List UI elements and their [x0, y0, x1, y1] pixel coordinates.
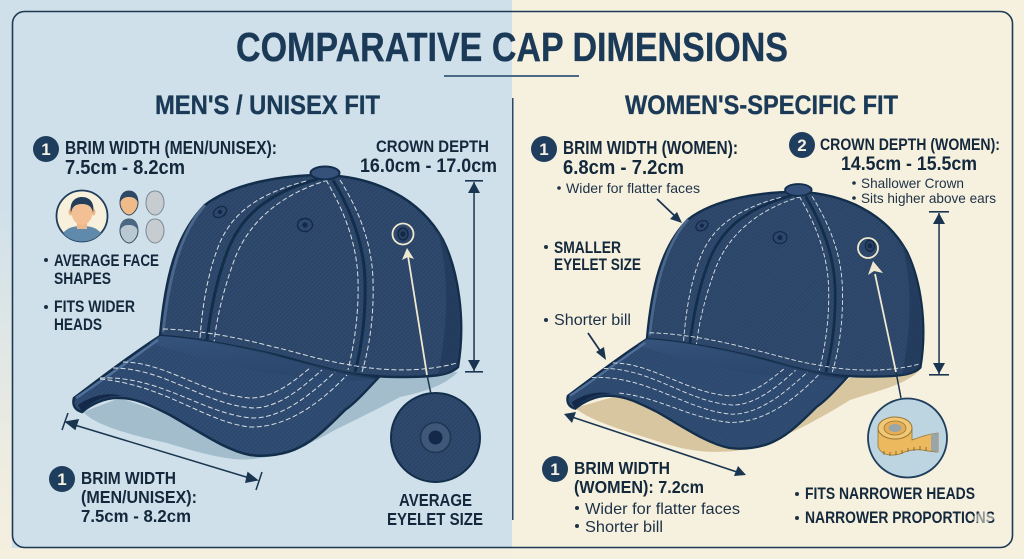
title: COMPARATIVE CAP DIMENSIONS	[236, 24, 788, 70]
text: average face shapes	[44, 252, 159, 288]
cap eyelets	[211, 204, 408, 240]
callout: crown depth: 16.0cm - 17.0cm	[360, 156, 497, 177]
text: average eyelet size: AVERAGE	[399, 490, 472, 510]
callout: brim width (men/unisex): BRIM WIDTH (MEN/UNISEX):	[65, 138, 277, 158]
callout: brim width (men/unisex)	[33, 136, 277, 179]
arrow: brim width (women)	[564, 412, 746, 476]
text: fits wider heads: HEADS	[54, 316, 102, 334]
callout: crown depth (women): 2	[797, 136, 807, 155]
cap shadow: women's	[575, 370, 920, 452]
cap eyelets: women's	[694, 219, 875, 251]
callout: brim width (women) lower: BRIM WIDTH	[574, 458, 670, 478]
callout: brim width (women) lower: Shorter bill	[585, 519, 663, 536]
text: fits wider heads: FITS WIDER	[54, 298, 135, 316]
text: average eyelet size: EYELET SIZE	[387, 509, 483, 529]
text: narrow fit bullets	[795, 485, 995, 527]
callout: brim width (women): BRIM WIDTH (WOMEN):	[563, 138, 738, 158]
cap: men's	[73, 166, 461, 456]
callout: brim width lower: 1	[57, 470, 67, 489]
callout: crown depth: CROWN DEPTH	[376, 137, 489, 156]
callout: brim width (women) lower: (WOMEN): 7.2cm	[574, 477, 704, 497]
callout: brim width (women): 6.8cm - 7.2cm	[563, 157, 684, 179]
text: average eyelet size	[387, 490, 483, 529]
arrow: to bill	[588, 333, 606, 360]
icon: tape measure	[868, 398, 947, 478]
callout: brim width (women) lower: Wider for flatter faces	[585, 501, 740, 518]
panel: women's background	[512, 0, 1024, 559]
crown button	[310, 166, 340, 180]
callout: crown depth (women): Shallower Crown	[861, 175, 964, 191]
text: average face shapes: SHAPES	[54, 270, 111, 288]
callout: brim width (women): 1	[539, 140, 549, 159]
callout: crown depth	[360, 137, 497, 177]
callout: brim width lower: BRIM WIDTH	[81, 468, 176, 488]
text: smaller eyelet size: SMALLER	[554, 239, 621, 257]
callout: crown depth (women): Sits higher above ears	[861, 190, 996, 206]
callout: crown depth (women): 14.5cm - 15.5cm	[841, 154, 977, 175]
cap: women's	[567, 184, 923, 449]
icon: small face shapes	[120, 191, 164, 243]
arrow: to brim label	[657, 199, 682, 223]
icon: eyelet close-up	[391, 393, 480, 482]
text: average face shapes: AVERAGE FACE	[54, 252, 159, 270]
arrow: brim width	[62, 413, 262, 490]
panel: men's background	[0, 0, 512, 559]
arrow: crown depth	[465, 180, 483, 373]
callout: brim width lower: (MEN/UNISEX):	[81, 487, 197, 507]
eyelet pointer	[392, 224, 431, 394]
callout: brim width (women)	[531, 136, 738, 196]
arrow: crown depth (women)	[929, 211, 949, 376]
icon: face avatar	[56, 190, 108, 242]
text: smaller eyelet size: EYELET SIZE	[554, 256, 641, 274]
text: narrow fit bullets: NARROWER PROPORTIONS	[805, 509, 995, 527]
callout: brim width (men/unisex): 1	[41, 140, 51, 159]
text: shorter bill: Shorter bill	[554, 312, 631, 329]
panel: men's / unisex fit	[33, 136, 497, 529]
heading: men's / unisex fit: MEN'S / UNISEX FIT	[155, 90, 380, 120]
heading: women's-specific fit: WOMEN'S-SPECIFIC FIT	[625, 90, 898, 120]
cap shadow: men's	[83, 372, 458, 459]
crown button: women's	[785, 184, 812, 196]
text: fits wider heads	[44, 298, 135, 334]
callout: brim width lower: 7.5cm - 8.2cm	[81, 506, 191, 526]
eyelet pointer (women)	[858, 238, 901, 398]
callout: brim width (women) lower: 1	[550, 460, 560, 479]
callout: brim width (men/unisex): 7.5cm - 8.2cm	[65, 157, 185, 179]
text: narrow fit bullets: FITS NARROWER HEADS	[805, 485, 975, 503]
callout: brim width (women): Wider for flatter faces	[566, 180, 700, 196]
text: smaller eyelet size	[544, 239, 641, 274]
callout: crown depth (women)	[789, 132, 1000, 206]
callout: brim width lower	[49, 466, 197, 526]
icon: watermark sparkle	[966, 500, 1000, 536]
callout: brim width (women) lower	[542, 456, 740, 536]
panel: women's-specific fit	[531, 132, 1000, 536]
